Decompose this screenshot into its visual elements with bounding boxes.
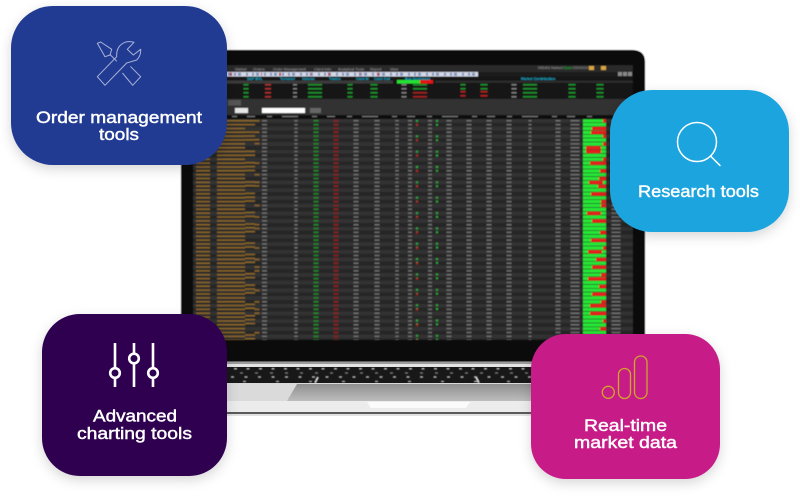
label	[574, 416, 678, 452]
laptop lid and bezel	[181, 50, 645, 362]
menu bar: Market	[235, 68, 248, 72]
menu bar	[193, 65, 633, 76]
menu bar: Orders	[253, 68, 265, 72]
menu bar: View	[390, 68, 398, 72]
table header	[193, 115, 633, 119]
label: tools	[99, 125, 139, 144]
label: Advanced	[93, 406, 177, 426]
market summary strip: Cash In	[356, 77, 369, 81]
icon: wrench and screwdriver	[97, 42, 141, 85]
laptop	[181, 50, 645, 416]
market summary strip: Cash Out	[374, 77, 391, 81]
laptop screen: trading terminal	[193, 65, 633, 340]
market summary strip: S&P BVL	[247, 77, 263, 81]
market summary strip: Market Contribution	[521, 77, 555, 81]
card: real-time market data	[531, 334, 720, 479]
filter bar	[193, 99, 633, 115]
palm rest	[190, 383, 570, 413]
menu bar: Open	[563, 66, 572, 70]
card: research tools	[610, 90, 789, 232]
label	[77, 406, 192, 443]
table rows	[193, 119, 633, 340]
table columns	[202, 116, 616, 340]
label: Real-time	[584, 416, 667, 435]
icon: signal bars	[602, 356, 647, 398]
menu bar: Client Info	[314, 68, 331, 72]
label: Research tools	[638, 182, 759, 201]
buy sentiment column	[586, 119, 606, 340]
toolbar	[193, 72, 478, 76]
label: market data	[574, 433, 678, 452]
card: advanced charting tools	[42, 314, 227, 476]
label: charting tools	[77, 424, 192, 443]
menu bar: Report	[370, 68, 382, 72]
menu bar: MIDAS	[538, 66, 550, 70]
card: order management tools	[11, 6, 227, 165]
market summary strip: Buy Sentiment	[405, 77, 431, 81]
market summary strip: Trades	[329, 77, 341, 81]
trackpad notch	[367, 402, 470, 408]
trackpad	[287, 384, 560, 401]
menu bar: DSXSGX	[573, 66, 589, 70]
menu bar: Market:	[551, 66, 564, 70]
menu bar: Analytical Tools	[338, 68, 364, 72]
market summary strip: Volume	[302, 77, 315, 81]
label	[36, 108, 202, 144]
keyboard deck	[190, 362, 570, 416]
icon: magnifying glass	[678, 122, 720, 166]
market summary strip: Turnover	[280, 77, 296, 81]
icon: sliders	[110, 343, 158, 387]
menu bar: Order Management	[273, 68, 307, 72]
market summary strip	[193, 76, 633, 98]
keyboard keys	[231, 369, 531, 383]
label: Order management	[36, 108, 202, 127]
